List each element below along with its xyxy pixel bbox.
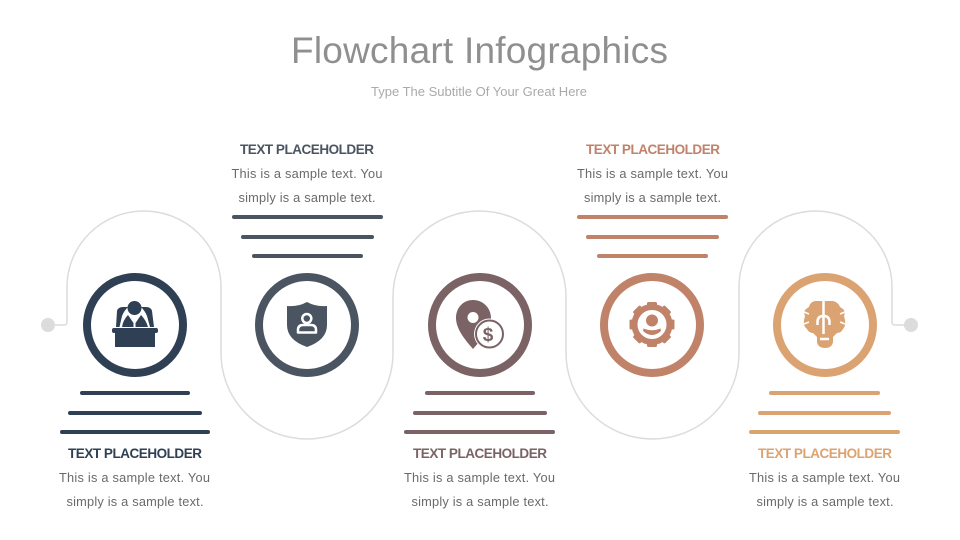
step 5 lines	[751, 393, 898, 432]
step 1	[59, 277, 210, 509]
step 2 ring	[259, 277, 355, 373]
step 5 ring	[777, 277, 873, 373]
step 2 heading: TEXT PLACEHOLDER	[240, 142, 374, 157]
step 1 heading: TEXT PLACEHOLDER	[68, 446, 202, 461]
step 1 text	[59, 470, 210, 509]
step 2 text: This is a sample text. You	[232, 166, 382, 181]
step 4 ring	[604, 277, 700, 373]
icon: shield with person	[287, 302, 327, 347]
step 2 text: simply is a sample text.	[238, 190, 376, 205]
step 5 heading: TEXT PLACEHOLDER	[758, 446, 892, 461]
step 3 text: simply is a sample text.	[412, 494, 548, 509]
step 5 text: This is a sample text. You	[749, 470, 900, 485]
icon: map pin with dollar coin	[456, 300, 505, 350]
step 5 text: simply is a sample text.	[756, 494, 894, 509]
icon: brain light bulb with arrow	[804, 301, 845, 348]
icon: speaker at podium	[112, 301, 158, 347]
step 3 heading: TEXT PLACEHOLDER	[413, 446, 547, 461]
step 3 ring	[432, 277, 528, 373]
icon: gear with person	[630, 302, 674, 347]
step 1 text: This is a sample text. You	[59, 470, 210, 485]
step 3 text	[404, 470, 555, 509]
step 4 text: This is a sample text. You	[577, 166, 728, 181]
step 1 lines	[62, 393, 208, 432]
step 1 text: simply is a sample text.	[66, 494, 204, 509]
step 5	[749, 277, 900, 509]
step 3 lines	[406, 393, 553, 432]
step 2 text	[232, 166, 382, 205]
step 4 lines	[579, 217, 726, 256]
step 4 text: simply is a sample text.	[584, 190, 721, 205]
step 4 text	[577, 166, 728, 205]
subtitle: Type The Subtitle Of Your Great Here	[371, 84, 587, 99]
step 4	[577, 142, 728, 373]
icon: map pin with dollar coin: $	[483, 325, 494, 346]
step 2	[232, 142, 382, 373]
step 2 lines	[234, 217, 381, 256]
flow connector line	[41, 211, 918, 439]
step 4 heading: TEXT PLACEHOLDER	[586, 142, 720, 157]
step 5 text	[749, 470, 900, 509]
step 3 text: This is a sample text. You	[404, 470, 555, 485]
step 1 ring	[87, 277, 183, 373]
step 3	[404, 277, 555, 509]
title: Flowchart Infographics	[291, 30, 668, 71]
